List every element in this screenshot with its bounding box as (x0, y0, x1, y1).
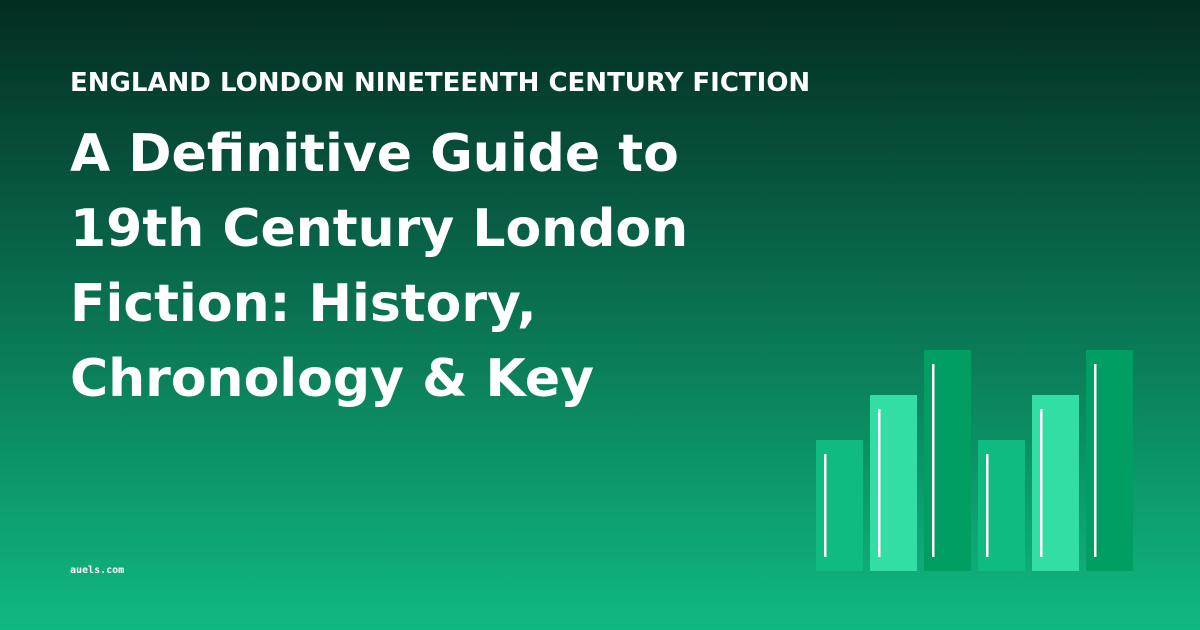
title: Chronology & Key (70, 349, 594, 409)
category heading: ENGLAND LONDON NINETEENTH CENTURY FICTION (70, 68, 810, 98)
title: A Definitive Guide to (70, 124, 679, 184)
bar 3 (924, 350, 971, 571)
title (70, 124, 688, 409)
bar 2 (870, 395, 917, 571)
title: 19th Century London (70, 199, 688, 259)
bar 6 (1086, 350, 1133, 571)
bar 4 (978, 440, 1025, 571)
site label: auels.com (70, 565, 124, 576)
bar 5 (1032, 395, 1079, 571)
title: Fiction: History, (70, 274, 537, 334)
bar 1 (816, 440, 863, 571)
